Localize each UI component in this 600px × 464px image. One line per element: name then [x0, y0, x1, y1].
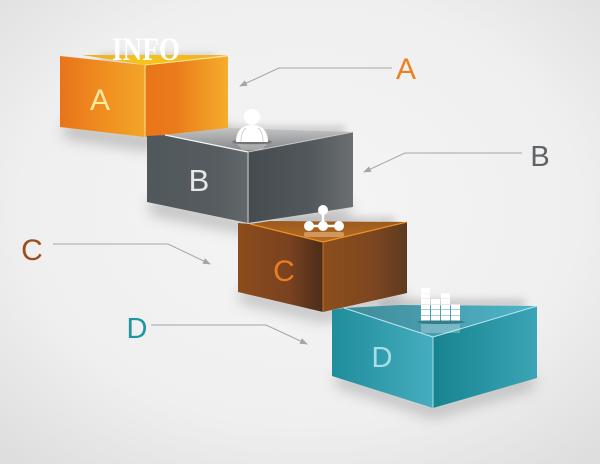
block D [332, 305, 537, 408]
block A highlights [145, 56, 228, 137]
block A top face [82, 55, 228, 65]
block A letter: A [90, 84, 110, 117]
icon: equalizer bars [417, 288, 465, 333]
block C letter: C [273, 255, 295, 288]
block B top face [165, 128, 353, 152]
block A left face [60, 56, 145, 137]
arrow to B [364, 153, 522, 172]
block B letter: B [189, 163, 209, 198]
label D: D [127, 313, 147, 345]
block C right face [323, 222, 407, 312]
block B highlights [165, 135, 248, 152]
block D right face [433, 306, 537, 408]
block D highlights [344, 306, 537, 337]
box shadows [64, 122, 534, 418]
label C: C [21, 234, 43, 267]
block C left face [238, 223, 323, 312]
block B right face [248, 132, 353, 223]
block A right face [145, 56, 228, 137]
arrow to D [151, 325, 307, 344]
icon: network nodes [304, 205, 344, 237]
block D letter: D [372, 342, 392, 374]
block C top face [250, 221, 407, 242]
block D left face [332, 308, 433, 408]
top halos [100, 54, 525, 309]
block D top face [344, 305, 537, 337]
block B left face [147, 135, 248, 223]
block A [60, 55, 228, 137]
label A: A [396, 53, 416, 86]
icon: person [232, 109, 272, 150]
arrow to A [240, 68, 392, 86]
block C [238, 221, 407, 312]
label B: B [530, 141, 550, 173]
block C highlights [250, 222, 407, 242]
block B [147, 128, 353, 223]
arrow to C [53, 244, 210, 264]
INFO label: INFO [112, 32, 180, 68]
